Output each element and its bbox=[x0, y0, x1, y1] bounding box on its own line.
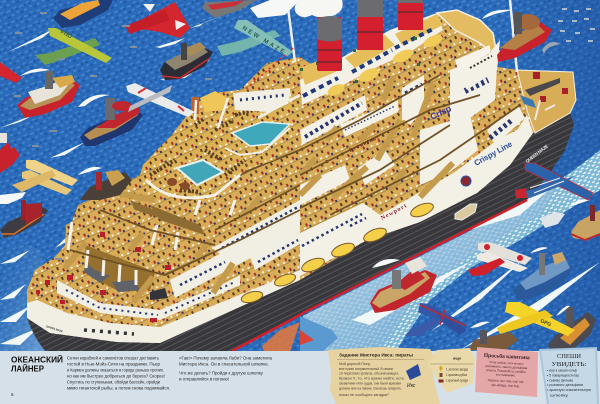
torn paper: key: 1 красный сундук bbox=[446, 378, 468, 382]
busy deck texture bbox=[27, 10, 533, 327]
boat: lower-left grey tug bbox=[0, 192, 48, 238]
stern red winches bbox=[36, 232, 171, 322]
curved bow superstructure bbox=[437, 10, 500, 90]
lower swimming pool bbox=[177, 160, 223, 185]
blue note: hurry to see bbox=[539, 347, 599, 404]
icon: pirate flag bbox=[406, 364, 421, 380]
blue note: hurry to see: • 5 поварящихся пар bbox=[547, 374, 579, 378]
torn paper: Mister X task: Кракен Х, то, что нужно найти, есть bbox=[339, 376, 404, 380]
pink note: captain's request: Уверена, они тоже ещё там bbox=[487, 378, 524, 384]
title: ЛАЙНЕР bbox=[11, 364, 45, 374]
bottom panel bbox=[0, 347, 600, 404]
deck rails bbox=[70, 75, 520, 275]
stern white columns bbox=[68, 200, 235, 285]
icon: chest bbox=[438, 380, 444, 382]
fish school bbox=[558, 8, 595, 42]
mast front bbox=[510, 0, 517, 72]
icon: star bbox=[439, 366, 443, 371]
lifeboats row bbox=[240, 200, 435, 305]
diagonal staircases bbox=[65, 77, 453, 302]
torn paper: Mister X task: 10 пиратских флагов, обозначающих, bbox=[339, 372, 399, 376]
pink note: captain's request: его название. bbox=[496, 372, 516, 378]
plane: red at left edge bbox=[0, 62, 22, 83]
small dolphins bbox=[14, 12, 212, 260]
boat: centre grey tug bbox=[156, 38, 213, 80]
title: ОКЕАНСКИЙ bbox=[11, 356, 63, 364]
blue note: hurry to see: • красную спасательную bbox=[547, 388, 591, 392]
superstructure base deck bbox=[27, 10, 576, 343]
lifeboat on the water bbox=[455, 204, 477, 220]
plane: teal New Maze bbox=[217, 20, 293, 56]
plane lettering: FND bbox=[59, 29, 73, 41]
sign: Crispy Line: Crispy Line bbox=[473, 139, 514, 168]
boat: blue tug bbox=[513, 247, 573, 300]
torn paper: Mister X task: мне нужен исправительный. В гавани bbox=[339, 367, 393, 371]
torn paper: Mister X task: должны мне на гавани, Сможешь поверить bbox=[339, 386, 401, 390]
plane: red biplane bbox=[125, 2, 190, 38]
torn paper: key: ищи bbox=[453, 356, 462, 360]
dolphin leaping bbox=[542, 42, 560, 54]
upper pool deck bbox=[142, 88, 300, 200]
blue note: hurry to see: СПЕШИ bbox=[557, 353, 581, 360]
boat: top orange cabin bbox=[53, 0, 113, 28]
gangway and white pillars bbox=[195, 95, 300, 128]
sign: circus board: Breakfast bbox=[348, 135, 380, 154]
pink note: captain's request: вспомнить, какого дельфина bbox=[485, 364, 528, 370]
boat: top grey and red bbox=[190, 0, 300, 28]
torn paper: key: 1 красная рубка bbox=[446, 373, 467, 377]
funnel 2 bbox=[357, 0, 383, 50]
boat: by pool deck bbox=[78, 167, 132, 200]
yellow roof cabin bbox=[200, 91, 227, 112]
pink note: captain's request: Просьба капитана bbox=[484, 352, 530, 361]
mid white walls bbox=[170, 200, 300, 298]
mast rear with flags bbox=[245, 0, 296, 110]
top deck arches bbox=[300, 13, 444, 105]
pink note: captain's request bbox=[475, 347, 538, 397]
blue note: hurry to see: • розового дельфина bbox=[547, 383, 583, 387]
pink note: captain's request: где-нибудь. Кэп Бэр bbox=[491, 383, 520, 388]
ship hull bbox=[27, 112, 574, 352]
sign: blue and red logo: Crisp bbox=[429, 103, 453, 122]
intro text bbox=[67, 356, 170, 390]
page number: 6 bbox=[11, 392, 14, 397]
story text bbox=[179, 356, 273, 382]
boat: dark and orange lower right bbox=[548, 306, 596, 350]
ship superstructure bbox=[27, 0, 576, 343]
torn paper: key: 1 золотая звезда bbox=[446, 368, 468, 372]
rowing boat bbox=[540, 212, 565, 228]
funnel 3 bbox=[398, 0, 423, 30]
torn paper: Mister X task bbox=[328, 347, 440, 404]
plane lettering: GPG bbox=[539, 318, 552, 328]
orange funnel bbox=[191, 97, 199, 114]
sign: Lessons Newport: Newport bbox=[380, 203, 408, 222]
plane: cream biplane bbox=[12, 160, 78, 195]
torn paper: Mister X task: Задание Мистера Икса: пираты bbox=[339, 352, 413, 358]
torn paper: Mister X task: Мой дорогой Пьер, bbox=[339, 362, 371, 366]
pink note: captain's request: Я так люблю, хотя не могу bbox=[489, 360, 524, 366]
torn paper: Mister X task: захватчики пяти судов, они были врагами bbox=[339, 382, 401, 386]
blue note: hurry to see: • съёмку фильма bbox=[547, 378, 573, 382]
story text: Мистера Икса. Он в спасательной шлюпке. bbox=[179, 362, 269, 366]
intro text: мимо гигантской рыбы, а потом снова поднимайся. bbox=[67, 386, 170, 390]
boat: centre navy tug bbox=[78, 94, 143, 146]
intro text: гостей в Нью-Мэйз-Сити на праздники. Пьер bbox=[67, 362, 161, 366]
boat: right behind bow bbox=[482, 10, 552, 62]
story text: Что же делать? Пройди к другую шлюпку bbox=[179, 370, 264, 376]
plane: dark blue biplane bbox=[405, 303, 467, 336]
plane: yellow monoplane bbox=[497, 302, 575, 336]
intro text: Сотни кораблей и самолётов спешат доставить bbox=[67, 356, 160, 360]
blue note: hurry to see: • игру в шашки-гольф bbox=[547, 368, 577, 372]
plane lettering: NEW MAZE bbox=[241, 26, 285, 55]
stern interior with statues bbox=[84, 200, 205, 300]
lower white wall strip bbox=[300, 115, 533, 276]
story text: «Гав!» Почему залаяла Лаби? Она заметила bbox=[179, 356, 273, 360]
hot tubs bbox=[167, 178, 190, 190]
icon: cabin bbox=[440, 373, 442, 377]
boat: left red tug bbox=[17, 68, 80, 118]
blue note: hurry to see: УВИДЕТЬ: bbox=[552, 361, 587, 368]
plane: light blue lower left bbox=[262, 316, 338, 352]
upper white walls with windows bbox=[300, 50, 525, 205]
story text: и отправляйся в погоню! bbox=[179, 376, 229, 382]
torn paper: Mister X task: показ не сообщить загадки? bbox=[339, 393, 389, 397]
funnel 1 bbox=[317, 16, 342, 71]
torn paper: key bbox=[428, 348, 475, 393]
smoke cloud bbox=[295, 0, 343, 18]
deck crowd bbox=[150, 108, 262, 192]
stern hull band: QUEEN MAZE bbox=[46, 324, 64, 333]
plane: green with yellow wings bbox=[35, 28, 112, 65]
bow foredeck bbox=[517, 70, 576, 133]
boat: white and red tug bbox=[370, 257, 437, 313]
stern hull band bbox=[27, 270, 300, 343]
intro text: но как им быстрее добраться до берега? Скорее! bbox=[67, 374, 165, 378]
plane: blue and red by hull bbox=[515, 163, 593, 200]
hull name: QUEEN MAZE bbox=[525, 144, 549, 164]
boat: lower centre brown bbox=[468, 322, 518, 350]
sign: decorated ship emblem bbox=[461, 176, 471, 186]
intro text: Спустись по ступенькам, обойди бассейн, пройди bbox=[67, 380, 161, 384]
plane: red with white wings bbox=[468, 242, 532, 276]
boat: right edge tug bbox=[568, 199, 600, 240]
white deck building bbox=[233, 88, 292, 112]
yellow deck domes bbox=[326, 82, 346, 98]
title bbox=[11, 356, 63, 374]
upper swimming pool bbox=[232, 122, 290, 146]
blue note: hurry to see: шлюпку bbox=[550, 394, 568, 398]
signature: Икс bbox=[407, 383, 416, 389]
pink note: captain's request: спасла. Пожалуйста, узнайте bbox=[486, 368, 526, 374]
palm trees bbox=[300, 37, 420, 83]
stern wall with windows bbox=[57, 275, 240, 320]
plane: silver with red bands bbox=[126, 83, 195, 117]
boat: left edge red bbox=[0, 133, 20, 173]
intro text: и Кармен должны оказаться в городе раньше прочих, bbox=[67, 368, 164, 372]
